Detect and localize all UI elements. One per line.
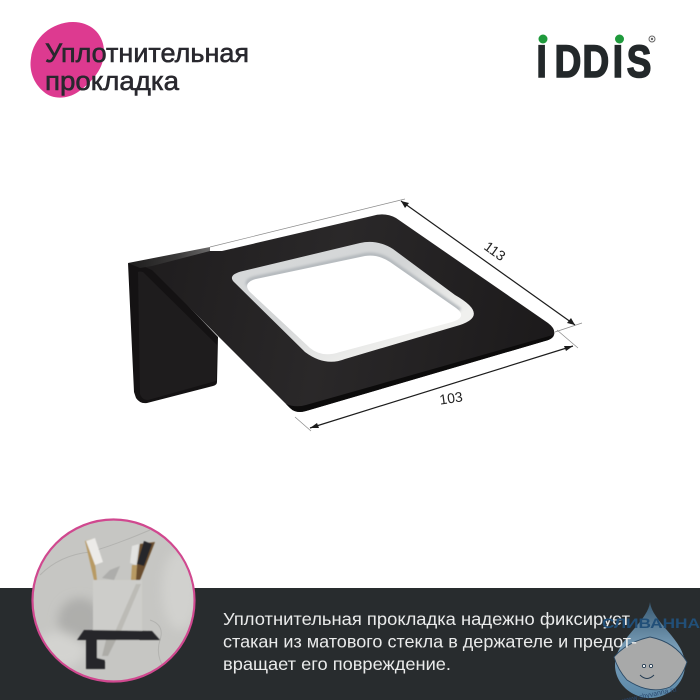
title text: Уплотнительная: [45, 38, 249, 68]
gasket opening: [247, 256, 461, 354]
highlight on top edge: [210, 248, 235, 251]
logo: IDDIS: IDDIS: [537, 37, 651, 87]
frosted gasket: [232, 242, 474, 362]
body text: вращает его повреждение.: [223, 654, 451, 674]
plate lower edge: [286, 335, 553, 412]
tub face: [640, 664, 654, 678]
heading: pink blob and title: [31, 22, 249, 98]
wall bracket: [86, 640, 105, 669]
shadow: [102, 566, 120, 580]
body text: Уплотнительная прокладка надежно фиксирует: [223, 609, 630, 629]
bathtub: [614, 637, 687, 690]
product: black shelf holder with gasket: [128, 214, 554, 412]
cup lower: [97, 640, 139, 661]
gasket inner shadow band: [248, 255, 460, 310]
wall bracket: [128, 263, 218, 403]
top sheen: [128, 247, 210, 268]
watermark title: СЛИВАННА: [602, 615, 700, 631]
marble background: [32, 520, 194, 682]
dimension 113: 113: [481, 238, 509, 264]
dimension 113: [401, 201, 575, 325]
body text: стакан из матового стекла в держателе и предот-: [223, 632, 637, 652]
dimension 103: 103: [438, 388, 464, 408]
brush right: [135, 542, 155, 580]
water drop: [615, 602, 685, 698]
round photo: toothbrushes in frosted cup: [32, 520, 198, 682]
pink blob: [31, 22, 104, 98]
extension lines: [210, 199, 582, 431]
dimension lines: [210, 199, 582, 431]
brush left: [85, 539, 97, 580]
frosted cup upper: [93, 580, 142, 634]
watermark: bathtub in water drop: [614, 602, 687, 700]
dimension 103: [310, 346, 573, 428]
shelf: [77, 630, 160, 640]
title text: прокладка: [45, 66, 180, 96]
dark bottom band: [0, 588, 700, 700]
shelf plate: [145, 214, 554, 412]
